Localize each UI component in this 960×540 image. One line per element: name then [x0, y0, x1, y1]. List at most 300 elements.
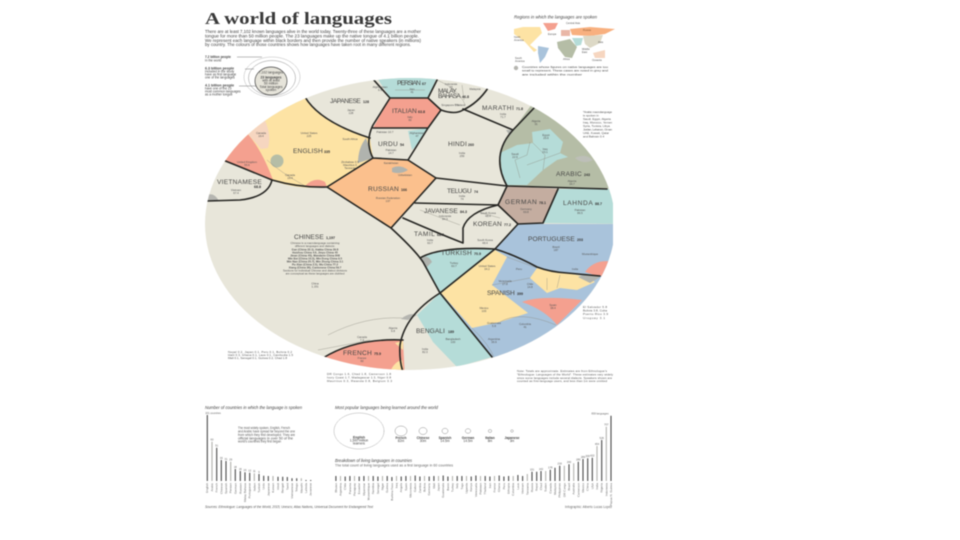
chart note — [238, 426, 295, 444]
map labels: Middle — [582, 47, 590, 51]
label: Arabic: Algeria — [532, 119, 541, 123]
label: Turkish — [441, 250, 481, 268]
label: Malay Bahasa — [438, 88, 469, 107]
bar labels: Sudan — [544, 483, 548, 492]
bubble: French — [395, 426, 407, 443]
label: Italian — [392, 108, 425, 122]
label: Chinese block: Gan (China 22.1), Hakka China 29.8 — [292, 248, 339, 252]
label: Bengali — [416, 328, 461, 354]
chart heading — [335, 458, 453, 468]
region: Italian — [373, 98, 441, 128]
bubbles heading: Most popular languages being learned around the world — [335, 405, 438, 410]
bar labels: Marathi — [299, 483, 303, 493]
chart heading: The total count of living languages used as a first language in 60 countries — [335, 464, 453, 468]
note: lower centre countries — [327, 372, 392, 383]
label: Korean: 77.2 — [504, 223, 511, 227]
region: Persian — [378, 78, 436, 98]
region: English: 19.4 — [258, 134, 264, 138]
thin sub-borders — [318, 80, 500, 350]
label: Tamil: 48.4 — [482, 241, 488, 245]
bar labels: Hindi — [276, 483, 280, 490]
bar values: 131 — [530, 468, 535, 472]
bar labels: Italian — [252, 483, 256, 491]
label: small region names: Indonesia — [445, 82, 458, 86]
note: Arabic regional list — [583, 110, 613, 138]
label: German — [505, 199, 546, 214]
label: Bengali: 82.3 — [422, 350, 428, 354]
label: Korean — [473, 211, 511, 228]
chart note: from which they first developed. They are — [238, 433, 295, 437]
legend labels: have one of the 23 — [205, 86, 232, 90]
label: Persian — [397, 80, 426, 94]
label: Chinese block: Min Nan (China 25.7), Min Zhong China 3.1 — [287, 260, 344, 264]
label: Chinese block: Pu-Xian (China 2.5), Wu China 77.2 — [292, 262, 338, 266]
legend: nested population ovals: spoken — [266, 88, 276, 92]
label: Persian: 41 — [410, 90, 414, 94]
label: Spanish: 41 — [523, 325, 527, 329]
label: Bengali: India — [422, 347, 428, 351]
bar values — [530, 412, 609, 472]
bar labels: Korean — [271, 483, 275, 493]
label: French: 75.9 — [374, 352, 381, 356]
bar labels — [205, 483, 313, 502]
label: Chinese block: CHINESE — [294, 234, 324, 241]
region: Portuguese — [496, 224, 614, 275]
label: Lahnda: 86.5 — [577, 211, 583, 215]
bubble: Chinese — [417, 428, 430, 443]
label: German: 69.8 — [523, 210, 529, 214]
bar labels: Chad — [539, 483, 543, 490]
bubble: Chinese: 30m — [420, 439, 426, 443]
label: Tamil: 68.8 — [437, 233, 444, 237]
map labels: South — [515, 56, 522, 60]
note: method footnote: counted as first-language users, and less than 1m were omitted — [517, 379, 607, 383]
bar labels: Guatemala — [441, 483, 445, 498]
label: Hindi: 260 — [468, 143, 474, 147]
legend: nested population ovals: 23 languages — [261, 76, 282, 80]
bar labels: Mozambique — [366, 483, 370, 500]
label: French: Canada — [357, 335, 367, 339]
bar labels: Iraq — [394, 483, 398, 488]
bar labels: Kenya — [469, 483, 473, 492]
bar labels — [334, 483, 613, 506]
bar labels: Peru — [502, 483, 506, 489]
bar labels: USA — [590, 483, 594, 489]
bar labels: Turkey — [450, 483, 454, 492]
bar labels: Turkish — [257, 483, 261, 493]
note: Arabic regional list: Iraq, Morocco, Yemen — [583, 120, 613, 124]
label: Marathi: 71.7 — [500, 115, 506, 119]
label: Turkish: 70.9 — [474, 252, 481, 256]
bubble: Chinese: Chinese — [417, 436, 430, 440]
bubble: English: English — [353, 436, 365, 440]
bar values: 142 — [539, 467, 544, 471]
bar labels: Chile — [343, 483, 347, 490]
map labels: Central Asia — [566, 21, 581, 25]
region: French — [326, 340, 405, 370]
label: Telugu: 74 — [474, 190, 478, 194]
bubble: Spanish: Spanish — [439, 436, 451, 440]
bar labels: Papua N. Guinea — [609, 483, 613, 506]
label: Persian: 67 — [422, 82, 426, 86]
bubble: French: 82m — [398, 439, 404, 443]
label: Russian: 166 — [401, 188, 407, 192]
bar values: 280 — [576, 458, 581, 462]
bar labels: Spanish — [224, 483, 228, 494]
label: Bengali: 189 — [448, 330, 454, 334]
bar values: 11 — [253, 469, 256, 473]
label: Lahnda — [563, 200, 602, 215]
bar labels: Togo — [460, 483, 464, 490]
label: Urdu: Pakistan — [386, 148, 397, 152]
bar labels: Spain — [404, 483, 408, 491]
label: Arabic: 31 — [534, 122, 538, 126]
label: Chinese block: 1,197 — [326, 236, 335, 240]
label: Marathi — [482, 105, 523, 119]
map labels: Asia — [598, 40, 604, 44]
map labels: America — [514, 38, 524, 42]
bar labels: Guinea — [385, 483, 389, 493]
bubble: Spanish: 14.5m — [440, 439, 450, 443]
label: Chinese block — [283, 234, 348, 288]
label: Arabic — [511, 119, 590, 186]
bar labels: Tanzania — [525, 483, 529, 495]
bar labels: Urdu — [262, 483, 266, 490]
bar labels: Brazil — [567, 483, 571, 491]
label: French — [343, 326, 398, 363]
bar values: 216 — [558, 462, 562, 466]
legend: nested population ovals: Total languages — [259, 85, 283, 89]
bar labels: Colombia — [511, 483, 515, 496]
label: English: 335 — [324, 150, 330, 154]
label: Vietnamese — [217, 179, 262, 195]
label: Arabic: 23.1 — [542, 150, 548, 154]
label: Telugu — [447, 188, 478, 201]
bar labels: Thailand — [483, 483, 487, 495]
label: Spanish: SPANISH — [487, 290, 515, 297]
region: Bengali teal — [417, 293, 492, 367]
label: Spanish: 5.8 — [492, 324, 496, 328]
map note with grey marker: small to represent. These cases are noted in grey and — [522, 68, 608, 72]
bar labels: China — [586, 483, 590, 491]
label: Javanese — [424, 208, 467, 221]
label: Malay Bahasa: Thailand — [455, 103, 466, 107]
bar labels: Nigeria — [600, 483, 604, 493]
label: Lahnda: 88.7 — [595, 202, 602, 206]
intro text: by country. The colours of those countries shows how languages have taken root in many different regions. — [205, 42, 411, 47]
chart note: world's countries they first began — [238, 440, 281, 444]
note: lower centre countries: DR Congo 1.6, Chad 1.8, Cameroon 1.8 — [327, 372, 391, 376]
label: Russian: Russian Federation — [376, 196, 401, 200]
bubble: French: French — [396, 436, 406, 440]
region: English: United Kingdom — [237, 160, 258, 164]
label: Bengali: Bangladesh — [446, 337, 461, 341]
dark bars — [336, 416, 611, 481]
thick language borders — [207, 78, 607, 372]
label: Vietnamese: 68.8 — [254, 185, 261, 189]
label: French: FRENCH — [343, 350, 372, 357]
label: Portuguese: Brazil — [552, 245, 560, 249]
bar labels: Telugu — [295, 483, 299, 492]
lighter bars — [340, 427, 606, 481]
label: Hindi: HINDI — [448, 141, 467, 148]
label: Chinese block: are conceptual as these languages are clubbed — [286, 272, 345, 276]
label: small region names — [373, 82, 481, 177]
bar labels: Venezuela — [474, 483, 478, 497]
legend labels: 6.3 billion people — [205, 66, 234, 70]
world map inset — [514, 14, 615, 76]
region: Arabic — [500, 106, 609, 189]
bar values: 51 — [215, 444, 219, 448]
bar labels: Micronesia — [408, 483, 412, 498]
bar values: 422 — [590, 454, 595, 458]
intro text: tongue for more than 50 million people. The 23 languages make up the native tongue of 4.1 billion people. — [205, 33, 419, 38]
bar labels: Germany — [427, 483, 431, 495]
bubble: German — [462, 429, 474, 443]
bar labels: India — [595, 483, 599, 490]
chart note: official languages in over 50 of the — [238, 436, 293, 440]
bubbles: most popular languages being learned — [334, 405, 520, 449]
bar labels: Indonesia — [604, 483, 608, 496]
bar labels: Arabic — [210, 483, 214, 492]
bar labels: Australia — [572, 483, 576, 495]
label: Javanese: JAVANESE — [424, 208, 458, 215]
note: lower left countries: Mali 0.1, Senegal 0.1, Guinea 0.2, Chad 1.8 — [228, 356, 287, 360]
bar labels: Bolivia — [422, 483, 426, 492]
bar labels: Lahnda — [304, 483, 308, 493]
region: base Chinese and beige languages — [204, 79, 609, 370]
label: Korean: KOREAN — [473, 221, 502, 228]
label: small region names: 9.5 — [378, 88, 382, 92]
bar labels: Canada — [548, 483, 552, 494]
label: Marathi: India — [500, 112, 506, 116]
bar labels: Javanese — [309, 483, 313, 496]
label: Malay Bahasa: BAHASA — [438, 93, 461, 100]
language labels — [217, 80, 602, 363]
label: Japanese: JAPANESE — [330, 98, 361, 105]
label: Japanese: Japan — [347, 108, 355, 112]
bubble: English — [334, 413, 384, 449]
label: Arabic: 25.6 — [543, 136, 549, 140]
bar values: 526 — [600, 436, 604, 440]
label: Chinese block: Chinese is a macrolanguage containing — [291, 241, 340, 245]
label: Spanish: 399 — [517, 292, 523, 296]
label: Javanese: Indonesia — [439, 214, 452, 218]
label: Hindi: 259 — [460, 154, 465, 158]
bar values: 707 — [604, 422, 609, 426]
label: Malay Bahasa: 46.8 — [462, 95, 469, 99]
chart heading: Number of countries in which the language is spoken — [205, 405, 302, 410]
label: Chinese block: 1,151 — [312, 284, 319, 288]
label: Japanese: 128 — [349, 111, 354, 115]
legend labels: have as first language — [205, 72, 236, 76]
label: small region names: Pakistan 10.7 — [377, 130, 394, 134]
label: Spanish: Chile — [527, 282, 534, 286]
label: Urdu: URDU — [378, 141, 398, 148]
map note with grey marker: are included within the number — [522, 72, 582, 76]
label: Japanese: 128 — [363, 100, 369, 104]
note: lower centre countries: Mauritius 0.3, Rwanda 0.8, Belgium 3.3 — [327, 379, 392, 383]
region: Spanish — [441, 250, 602, 358]
bar labels: Namibia — [371, 483, 375, 494]
map continents — [514, 23, 615, 63]
bar labels: Russian — [238, 483, 242, 494]
label: Tamil: South Korea — [477, 238, 493, 242]
map labels: East — [582, 50, 587, 54]
label: Spanish: Peru — [516, 267, 522, 271]
label: Marathi: MARATHI — [482, 105, 514, 112]
label: Portuguese: 187 — [554, 248, 559, 252]
label: Russian: RUSSIAN — [368, 186, 399, 193]
note: method footnote: since some languages include several dialects. Speakers shown are — [517, 376, 612, 380]
label: Tamil: 60.7 — [427, 241, 433, 245]
bar values: 16 — [244, 468, 247, 472]
bar labels: Pakistan — [478, 483, 482, 495]
region: English: Tanzania — [344, 166, 356, 170]
note: Arabic regional list: UAE, Kuwait, Qatar — [583, 131, 609, 135]
title: A world of languages — [205, 9, 393, 28]
bar labels: Tamil — [285, 483, 289, 490]
label: Spanish: 34.2 — [484, 267, 490, 271]
label: small region names: Uzbekistan — [398, 173, 412, 177]
label: small region names: 47 — [415, 134, 419, 138]
lighter bars — [212, 442, 301, 481]
label: Malay Bahasa: MALAY — [438, 88, 457, 95]
label: Bengali: 100 — [451, 340, 456, 344]
label: small region names: Afghanistan — [410, 131, 425, 135]
bar labels: Benin — [446, 483, 450, 491]
map labels: Russia — [583, 28, 591, 32]
bar labels: Persian — [229, 483, 233, 493]
label: Arabic: Algeria — [568, 179, 577, 183]
legend labels: as a mother tongue — [205, 92, 233, 96]
intro text — [205, 29, 422, 47]
bar values: 289 — [581, 455, 586, 459]
bar labels: France — [492, 483, 496, 492]
label: French: France — [358, 356, 367, 360]
bar labels: Mali — [432, 483, 436, 489]
label: Spanish: 36.9 — [491, 340, 497, 344]
label: Portuguese — [528, 236, 598, 271]
map title: Regions in which the languages are spoken — [514, 14, 598, 20]
legend labels: included in the study — [205, 70, 234, 74]
legend: nested population ovals: 50 million — [264, 82, 278, 86]
label: Arabic: ARABIC — [556, 171, 582, 178]
map labels: North — [514, 35, 521, 39]
label: Arabic: Iraq — [543, 147, 548, 151]
bar labels: Nepal — [535, 483, 539, 491]
label: Spanish: Venezuela — [498, 279, 512, 283]
region: Lahnda — [544, 188, 614, 224]
map labels: Europe — [548, 32, 557, 36]
chart note: and Arabic have spread far beyond the one — [238, 430, 295, 434]
label: French: 60 — [360, 359, 364, 363]
bubble: German: 14.5m — [463, 439, 473, 443]
bar labels: Myanmar — [362, 483, 366, 496]
label: Hindi: India — [459, 151, 465, 155]
note: lower left countries: Nepal 0.2, Japan 0.1, Peru 0.1, Bolivia 0.2 — [228, 350, 292, 354]
label: Spanish: United States — [479, 264, 496, 268]
label: Japanese — [330, 98, 369, 115]
label: Arabic: Saudi — [511, 152, 519, 156]
region: English: Canada — [256, 131, 266, 135]
region: English — [225, 98, 373, 188]
note: Spanish regional list: El Salvador 5.8 — [583, 305, 607, 309]
bar values: 31 — [225, 457, 228, 461]
bar values: 178 — [548, 466, 553, 470]
bar values: 101 countries — [205, 411, 221, 415]
chart heading: Breakdown of living languages in countries — [335, 458, 413, 463]
label: Spanish: Guatemala — [487, 321, 501, 325]
bar labels: Italy — [455, 483, 459, 489]
bar values: 839 languages — [591, 412, 609, 416]
label: French: Algeria — [389, 326, 398, 330]
grey small blobs — [205, 194, 417, 320]
label: Bengali: BENGALI — [416, 328, 445, 335]
note: lower left countries: Haiti 0.3, Ghana 0.1, Laos 0.1, Cambodia 1.5 — [228, 353, 293, 357]
label: Tamil — [414, 231, 493, 245]
chart note: The most widely spoken, English, French — [238, 426, 290, 430]
region: English: Mauritius 0 — [343, 163, 357, 167]
side notes — [228, 110, 614, 383]
label: Portuguese: Mozambique — [582, 252, 598, 256]
source line: Sources: Ethnologue: Languages of the World, 2015; Unesco; Atlas Nations, Universal Document for Endangered Text — [205, 504, 374, 509]
label: Chinese block: different languages and dialects: — [295, 244, 335, 248]
region: English: 225 — [307, 134, 312, 138]
label: small region names: Singapore 0.5 — [441, 103, 459, 107]
label: Persian: PERSIAN — [397, 80, 421, 87]
label: Tamil: TAMIL — [414, 231, 435, 238]
label: Spanish: 103 — [482, 309, 487, 313]
label: Hindi — [448, 141, 474, 158]
bar values: 300 — [586, 454, 590, 458]
bar labels: Iran — [488, 483, 492, 488]
label: Chinese block: Min Bei (China 10.3), Min Dong China 9.5 — [288, 256, 342, 260]
label: Russian: 137 — [386, 199, 391, 203]
label: Russian — [368, 186, 407, 203]
bubble: Japanese: 3m — [510, 439, 515, 443]
map note with grey marker — [514, 65, 608, 76]
note: Arabic regional list: Jordan, Lebanon, Oman — [583, 128, 612, 132]
bar labels: Malay Bahasa — [243, 483, 247, 502]
label: Javanese: 84.3 — [442, 217, 448, 221]
label: Turkish: Turkey — [450, 261, 459, 265]
label: Arabic: 34.7 — [569, 182, 575, 186]
bar labels: Ethiopia — [507, 483, 511, 494]
region: Russian — [327, 158, 436, 228]
bar labels: Japan — [436, 483, 440, 491]
label: German: GERMAN — [505, 199, 537, 206]
legend labels: in the world — [205, 58, 222, 62]
bubble: Spanish — [439, 428, 451, 443]
bars — [207, 415, 311, 481]
bubble: Italian: 8m — [488, 439, 493, 443]
intro text: We represent each language within black borders and then provide the number of native speakers (in millions) — [205, 38, 422, 43]
region: English: South Africa — [342, 137, 358, 141]
label: Italian: ITALIAN — [392, 108, 417, 115]
note: method footnote — [517, 369, 614, 383]
note: Spanish regional list — [583, 305, 608, 320]
bar labels: Argentina — [338, 483, 342, 496]
label: Telugu: 74 — [460, 197, 464, 201]
label: Lahnda: LAHNDA — [563, 200, 593, 207]
bar values: 33 — [220, 456, 223, 460]
bar labels: Bengali — [281, 483, 285, 493]
label: Spanish: 27.8 — [502, 282, 508, 286]
label: Vietnamese: Vietnam — [231, 188, 242, 192]
region: English: Zimbabwe 0.5 — [341, 160, 359, 164]
label: Korean: 48.4 — [485, 214, 491, 218]
